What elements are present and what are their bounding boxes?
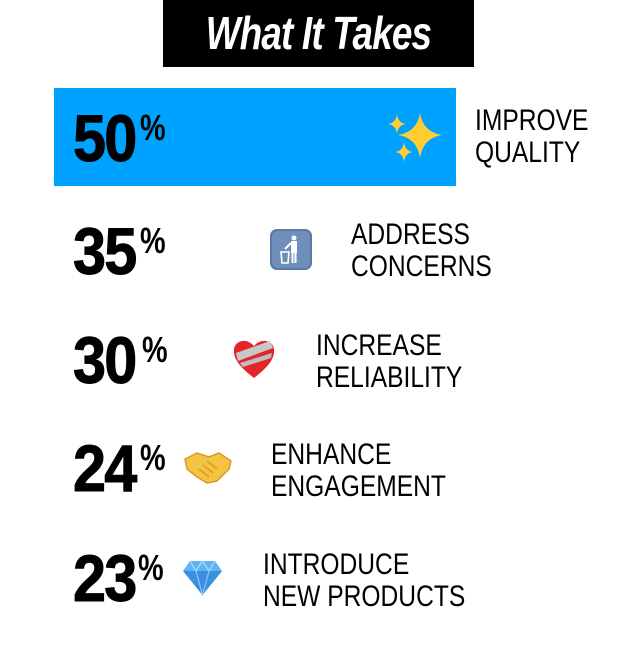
row: increase reliability bbox=[73, 323, 462, 397]
label bbox=[475, 104, 588, 169]
percent 30: 30 bbox=[73, 323, 135, 397]
label: INCREASE bbox=[316, 329, 442, 362]
label bbox=[351, 218, 492, 283]
label bbox=[263, 548, 465, 613]
percent 23: 23 bbox=[73, 541, 135, 615]
blue bar bbox=[54, 88, 456, 186]
label: ADDRESS bbox=[351, 218, 470, 251]
row: increase reliability: % bbox=[142, 329, 168, 370]
percent 35: 35 bbox=[73, 214, 135, 288]
percent 50: 50 bbox=[73, 101, 135, 175]
label: RELIABILITY bbox=[316, 361, 462, 394]
title bbox=[163, 0, 474, 67]
row: improve quality bbox=[54, 88, 588, 186]
row: address concerns bbox=[73, 214, 492, 288]
label: QUALITY bbox=[475, 136, 580, 169]
title: What It Takes bbox=[206, 7, 431, 59]
icon: trash sign bbox=[270, 229, 312, 270]
row: introduce new products bbox=[73, 541, 465, 615]
label: NEW PRODUCTS bbox=[263, 580, 465, 613]
row: improve quality: % bbox=[140, 107, 166, 148]
row: introduce new products: % bbox=[138, 547, 164, 588]
label: ENHANCE bbox=[271, 438, 391, 471]
label: CONCERNS bbox=[351, 250, 492, 283]
row: address concerns: % bbox=[140, 220, 166, 261]
label: INTRODUCE bbox=[263, 548, 409, 581]
row: enhance engagement: % bbox=[140, 437, 166, 478]
row: enhance engagement bbox=[73, 431, 446, 505]
percent 24: 24 bbox=[73, 431, 135, 505]
icon: gem bbox=[183, 560, 222, 596]
label bbox=[271, 438, 446, 503]
icon: handshake bbox=[184, 452, 232, 484]
label: IMPROVE bbox=[475, 104, 588, 137]
label bbox=[316, 329, 462, 394]
icon: mending heart bbox=[234, 340, 274, 378]
label: ENGAGEMENT bbox=[271, 470, 446, 503]
icon: sparkles bbox=[388, 113, 442, 162]
